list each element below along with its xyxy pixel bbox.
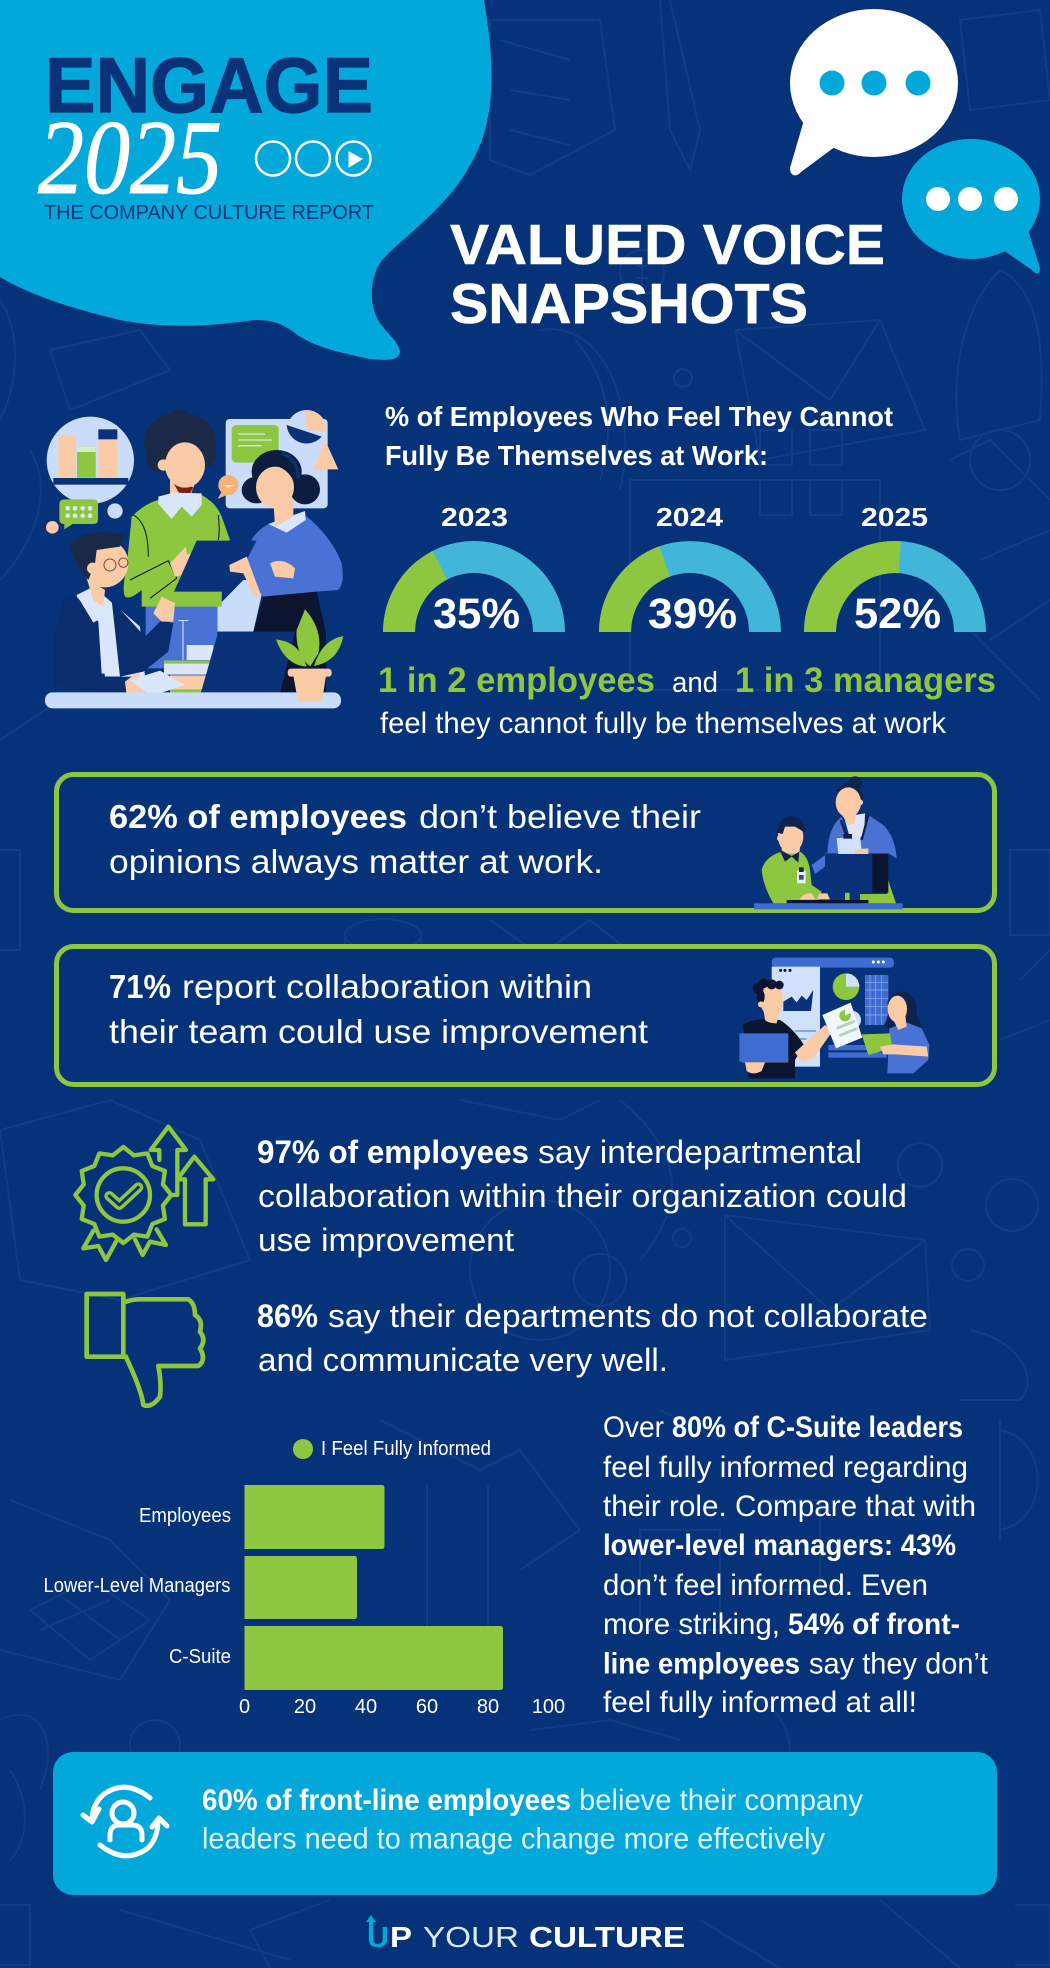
text: informed paragraph: their role. Compare that with — [603, 1490, 976, 1523]
logo: Up Your Culture — [366, 1915, 685, 1954]
desk top — [45, 692, 341, 708]
potted plant — [276, 609, 343, 702]
callout: 1 in 2 employees: 1 in 3 managers — [735, 661, 996, 700]
stat text: believe their company — [579, 1784, 863, 1817]
gauge chart: 2025 52%: 2025 — [861, 502, 928, 532]
legend: I Feel Fully Informed — [321, 1438, 491, 1460]
gauge chart: 2024 39%: 39% — [648, 590, 737, 638]
heading: cannot be themselves — [385, 401, 893, 471]
callout: 1 in 2 employees — [378, 661, 996, 740]
icon: white chat bubble — [790, 9, 958, 175]
gauge chart: 2024 39%: 2024 — [656, 502, 724, 532]
wall panel with pie chart — [218, 410, 338, 508]
icon: thumbs down — [87, 1294, 203, 1406]
gauge chart: 2023 35%: 35% — [433, 590, 520, 638]
text: informed paragraph — [603, 1411, 989, 1719]
panel: opinions — [56, 774, 994, 910]
logo: Up Your Culture: U — [367, 1922, 389, 1954]
text: informed paragraph: 80% of C-Suite leaders — [672, 1411, 963, 1444]
stat text — [202, 1784, 863, 1856]
logo: Up Your Culture: YOUR — [423, 1922, 519, 1954]
stat text: 60% of front-line employees — [202, 1784, 571, 1817]
play circles icon — [256, 142, 370, 176]
text: interdepartmental collaboration: say interdepartmental — [538, 1134, 862, 1170]
stat text: their team could use improvement — [109, 1013, 648, 1050]
value axis: 80 — [477, 1696, 499, 1718]
report subtitle: THE COMPANY CULTURE REPORT — [44, 202, 374, 224]
gauge chart: 2023 35% — [383, 502, 565, 638]
stat text: opinions always matter at work. — [109, 843, 603, 880]
callout: 1 in 2 employees: feel they cannot fully be themselves at work — [380, 707, 947, 740]
text: informed paragraph: more striking, — [603, 1608, 780, 1641]
man with green sweater — [124, 410, 230, 668]
green message bubble — [46, 499, 123, 534]
text: informed paragraph: don’t feel informed. Even — [603, 1569, 928, 1602]
bar chart: I feel fully informed — [44, 1438, 565, 1718]
text: informed paragraph: feel fully informed regarding — [603, 1451, 968, 1484]
woman with blue sweater — [217, 450, 343, 693]
gauge chart: 2024 39% — [599, 502, 781, 638]
category labels — [44, 1505, 231, 1668]
title: VALUED VOICE — [450, 213, 885, 277]
gauge chart: 2023 35%: 2023 — [441, 502, 508, 532]
text: interdepartmental collaboration: collaboration within their organization could — [258, 1178, 907, 1214]
paper notebook — [130, 671, 185, 696]
title: SNAPSHOTS — [450, 272, 808, 336]
heading: cannot be themselves: Fully Be Themselves at Work: — [385, 440, 768, 471]
text: informed paragraph: 54% of front- — [788, 1608, 960, 1641]
value axis: 40 — [355, 1696, 377, 1718]
text: departments do not collaborate: say their departments do not collaborate — [328, 1298, 928, 1334]
stat text: don’t believe their — [419, 798, 701, 835]
value axis: 0 — [239, 1696, 250, 1718]
text: departments do not collaborate — [257, 1298, 928, 1378]
illustration: coworkers with dashboard — [739, 958, 929, 1078]
title — [450, 213, 885, 336]
chart thought bubble — [47, 417, 134, 504]
stat text: 71% — [109, 968, 171, 1005]
illustration: team at desk — [45, 410, 343, 708]
seated man with glasses — [53, 532, 175, 697]
stat text — [109, 968, 648, 1050]
illustration: two coworkers at monitor — [754, 776, 903, 909]
text: interdepartmental collaboration: use improvement — [258, 1222, 514, 1258]
text: informed paragraph: say they don’t — [809, 1648, 989, 1680]
text: interdepartmental collaboration: 97% of employees — [257, 1134, 529, 1170]
text: informed paragraph: lower-level managers: 43% — [603, 1529, 956, 1562]
category labels: Employees — [139, 1505, 231, 1527]
text: informed paragraph: feel fully informed at all! — [603, 1686, 917, 1719]
panel: team collaboration — [56, 946, 994, 1084]
category labels: Lower-Level Managers — [44, 1575, 231, 1597]
heading: cannot be themselves: % of Employees Who Feel They Cannot — [385, 401, 893, 432]
stat text — [109, 798, 701, 880]
text: departments do not collaborate: and communicate very well. — [258, 1342, 668, 1378]
icon: gear badge with arrows — [75, 1127, 213, 1260]
logo: Up Your Culture: P — [390, 1922, 412, 1954]
bars — [244, 1485, 503, 1690]
logo: Up Your Culture: CULTURE — [529, 1922, 685, 1954]
value axis: 60 — [416, 1696, 438, 1718]
text: informed paragraph: line employees — [603, 1648, 800, 1680]
stat text: 62% of employees — [109, 798, 407, 835]
text: informed paragraph: Over — [603, 1411, 664, 1444]
woman hand on tablet — [229, 557, 262, 597]
value axis: 20 — [294, 1696, 316, 1718]
callout: 1 in 2 employees: and — [672, 667, 718, 699]
icon: blue chat bubble — [902, 139, 1040, 274]
gauge chart: 2025 52% — [804, 502, 986, 638]
header speech bubble — [0, 0, 492, 360]
stat text: report collaboration within — [182, 968, 592, 1005]
text: departments do not collaborate: 86% — [257, 1298, 318, 1334]
value axis — [239, 1696, 565, 1718]
panel: change management — [53, 1752, 997, 1895]
tablet — [174, 541, 257, 592]
script year 2025: 2025 — [38, 99, 222, 216]
books stack — [164, 620, 213, 696]
laptop — [166, 632, 295, 699]
category labels: C-Suite — [169, 1646, 231, 1668]
gauge chart: 2025 52%: 52% — [854, 590, 941, 638]
callout: 1 in 2 employees: 1 in 2 employees — [378, 661, 655, 700]
icon: person with cycle arrows — [83, 1787, 167, 1856]
stat text: leaders need to manage change more effectively — [202, 1822, 825, 1856]
logo word ENGAGE: ENGAGE — [45, 41, 373, 129]
text: interdepartmental collaboration — [257, 1134, 907, 1258]
value axis: 100 — [532, 1696, 565, 1718]
